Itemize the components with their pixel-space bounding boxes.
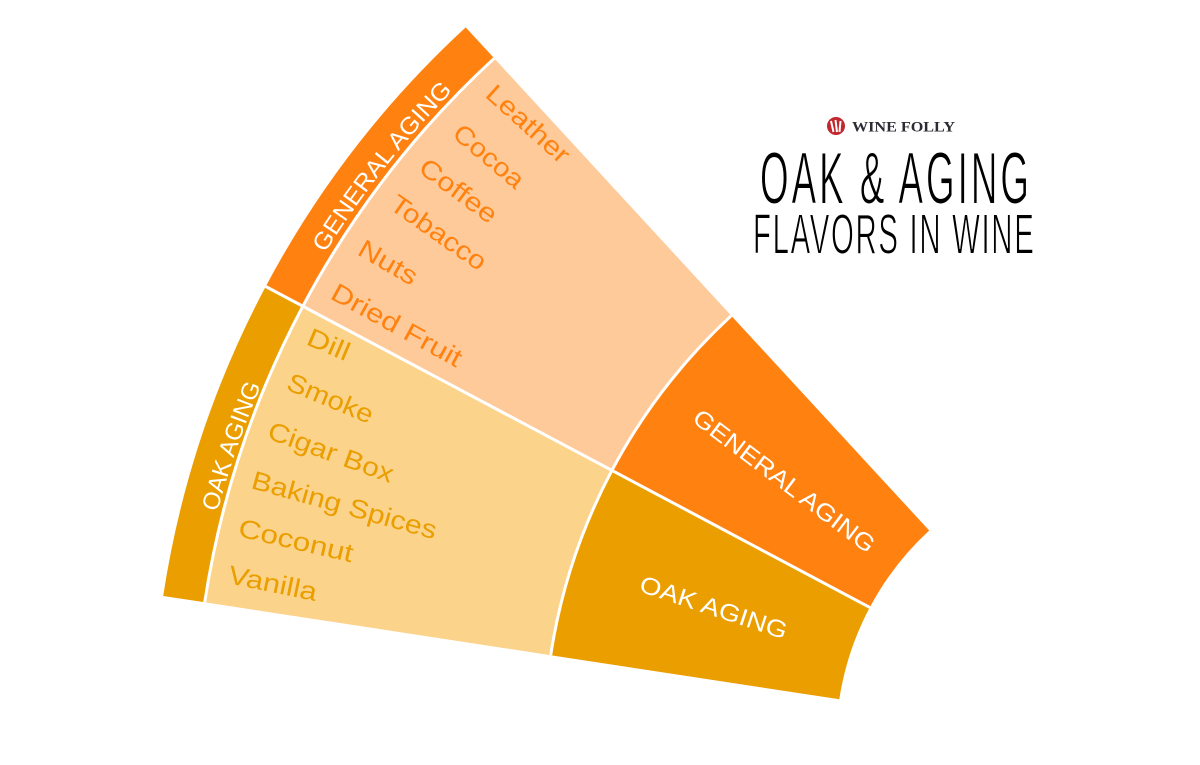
flavor: smoke: Smoke bbox=[283, 367, 378, 430]
flavor: baking spices: Baking Spices bbox=[248, 465, 440, 545]
label: oak aging band: OAK AGING bbox=[203, 382, 259, 510]
flavor: tobacco: Tobacco bbox=[385, 188, 493, 277]
label: general aging band: GENERAL AGING bbox=[314, 83, 450, 250]
flavor: vanilla: Vanilla bbox=[226, 559, 321, 607]
flavor: cigar box: Cigar Box bbox=[264, 415, 398, 489]
label: oak aging base: OAK AGING bbox=[636, 571, 791, 645]
flavor: leather: Leather bbox=[480, 78, 577, 170]
fan chart bbox=[163, 27, 930, 700]
flavor: dried fruit: Dried Fruit bbox=[326, 277, 469, 373]
panel: oak aging flavors bbox=[205, 306, 612, 655]
panel: general aging outer band bbox=[266, 27, 494, 304]
title bbox=[753, 138, 1034, 266]
panel: general aging base segment bbox=[612, 316, 929, 607]
flavor: coconut: Coconut bbox=[236, 513, 357, 568]
panel: oak aging outer band bbox=[163, 286, 301, 602]
panel: oak aging base segment bbox=[551, 470, 870, 699]
brand name: WINE FOLLY bbox=[852, 120, 956, 136]
icon: wine folly emblem bbox=[827, 117, 845, 135]
flavor: coffee: Coffee bbox=[413, 152, 504, 229]
title line two: FLAVORS IN WINE bbox=[753, 202, 1034, 266]
flavor: nuts: Nuts bbox=[353, 233, 423, 291]
flavor: cocoa: Cocoa bbox=[447, 118, 531, 195]
brand logo bbox=[827, 117, 956, 136]
flavor: dill: Dill bbox=[303, 322, 355, 367]
panel: general aging flavors bbox=[303, 58, 731, 470]
label: general aging base: GENERAL AGING bbox=[687, 404, 880, 559]
title line one: OAK & AGING bbox=[760, 138, 1029, 220]
